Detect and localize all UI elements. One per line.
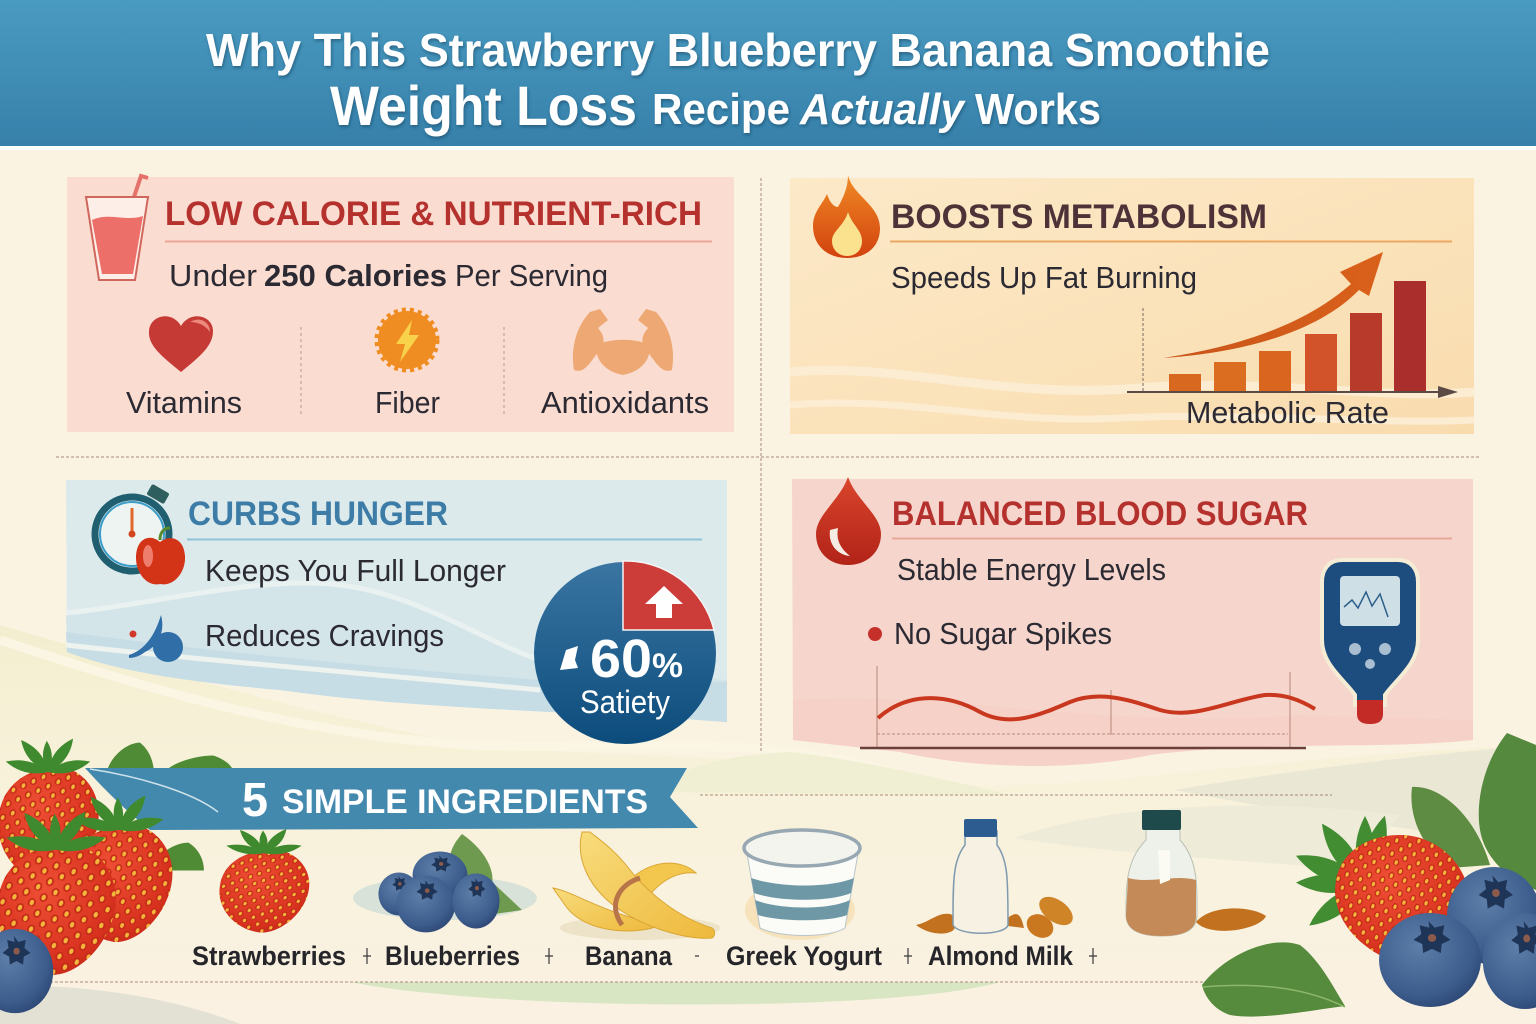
banner: 5 simple ingredients xyxy=(85,768,698,830)
ingredient labels: Strawberries xyxy=(192,941,346,971)
ingredient labels: Greek Yogurt xyxy=(726,941,882,971)
ingredient: greek yogurt xyxy=(744,830,860,940)
bullet xyxy=(868,627,882,641)
title: Recipe xyxy=(652,85,790,134)
leaves behind banner xyxy=(106,743,234,776)
heading: LOW CALORIE & NUTRIENT-RICH xyxy=(165,195,702,233)
icon: heart xyxy=(149,316,213,372)
calories text: Under xyxy=(169,258,257,293)
ingredient: banana xyxy=(553,832,720,940)
ingredient labels xyxy=(192,941,1097,971)
calories text: Per Serving xyxy=(455,258,608,293)
icon: flame xyxy=(813,175,880,258)
satiety pie: Satiety xyxy=(580,684,670,720)
calories text xyxy=(169,258,608,293)
title: Weight Loss xyxy=(330,74,637,137)
header banner xyxy=(0,0,1536,150)
bar chart xyxy=(1127,252,1458,398)
text: no sugar spikes: No Sugar Spikes xyxy=(894,616,1112,651)
text: reduces cravings: Reduces Cravings xyxy=(205,618,444,653)
banner: 5 simple ingredients: SIMPLE INGREDIENTS xyxy=(282,783,648,821)
panel: blood sugar xyxy=(792,477,1473,766)
background hills xyxy=(0,625,1536,1024)
ingredient: almond milk bottle xyxy=(1126,810,1266,936)
fruit pile: right xyxy=(1202,733,1536,1017)
glucose meter xyxy=(1322,560,1418,724)
heading: BALANCED BLOOD SUGAR xyxy=(892,495,1308,533)
subheading: Speeds Up Fat Burning xyxy=(891,260,1197,295)
title: Works xyxy=(975,85,1101,134)
icon: clock and apple xyxy=(95,484,185,584)
label: vitamins: Vitamins xyxy=(126,385,242,420)
growth arrow xyxy=(1163,252,1383,358)
heading: BOOSTS METABOLISM xyxy=(891,198,1267,236)
heading: CURBS HUNGER xyxy=(188,495,448,533)
icon: smoothie glass xyxy=(86,176,148,280)
calories text: 250 Calories xyxy=(264,258,447,293)
title xyxy=(206,24,1270,137)
text: stable energy: Stable Energy Levels xyxy=(897,552,1166,587)
fruit pile: left xyxy=(0,736,204,1013)
text: keeps you full: Keeps You Full Longer xyxy=(205,553,506,588)
icon: reduced cravings xyxy=(129,615,183,662)
icon: fiber burst xyxy=(377,310,437,370)
ingredient: blueberries xyxy=(353,834,537,932)
ingredient labels: Almond Milk xyxy=(928,941,1074,971)
satiety pie xyxy=(534,561,716,744)
ingredient: almond milk xyxy=(916,819,1078,943)
blood sugar line chart xyxy=(860,666,1315,748)
label: fiber: Fiber xyxy=(375,385,440,420)
panel dividers xyxy=(50,178,1480,982)
icon: blood drop xyxy=(816,477,881,565)
satiety pie: % xyxy=(652,647,683,685)
title: Why This Strawberry Blueberry Banana Smoothie xyxy=(206,24,1270,76)
ingredient: strawberry xyxy=(219,827,309,933)
satiety pie: 60 xyxy=(590,629,652,689)
panel: boosts metabolism xyxy=(790,175,1474,434)
ingredient labels: Blueberries xyxy=(385,941,520,971)
icon: muscles xyxy=(573,309,673,375)
title: Actually xyxy=(799,85,966,134)
banner: 5 simple ingredients: 5 xyxy=(242,774,268,827)
chart label: Metabolic Rate xyxy=(1186,395,1389,430)
label: antioxidants: Antioxidants xyxy=(541,385,709,420)
ingredient labels: Banana xyxy=(585,941,673,971)
panel: low calorie xyxy=(67,176,734,432)
panel: curbs hunger xyxy=(66,480,727,744)
